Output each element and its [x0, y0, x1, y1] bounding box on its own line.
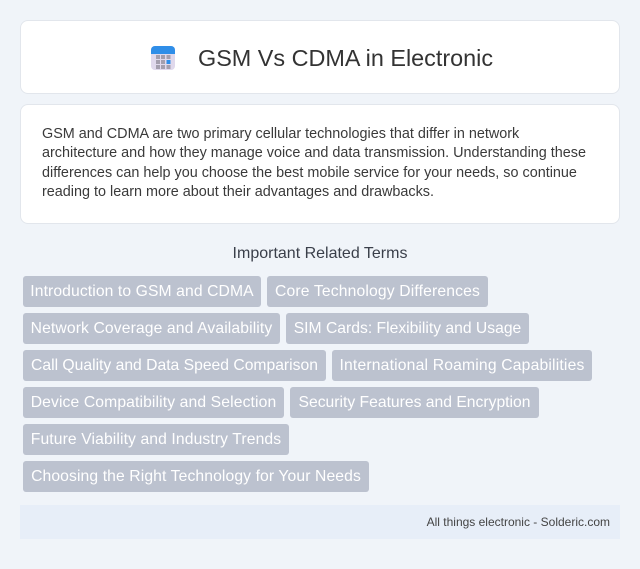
related term tags: Device Compatibility and Selection [31, 394, 276, 411]
related term tags: Security Features and Encryption [299, 394, 530, 411]
title: GSM Vs CDMA in Electronic [198, 45, 493, 71]
related term tags: Core Technology Differences [275, 283, 480, 300]
icon: calendar keypad [151, 46, 175, 70]
intro panel [20, 104, 620, 224]
section heading: Important Related Terms [233, 245, 407, 262]
footer bar [20, 505, 620, 539]
header panel [20, 20, 620, 94]
intro text: architecture and how they manage voice and data transmission. Understanding these [42, 145, 586, 161]
intro text: reading to learn more about their advantages and drawbacks. [42, 184, 434, 200]
related term tags: International Roaming Capabilities [339, 357, 585, 374]
related term tags: Call Quality and Data Speed Comparison [31, 357, 318, 374]
related term tags [23, 276, 592, 492]
related term tags: Network Coverage and Availability [31, 320, 272, 337]
related term tags: SIM Cards: Flexibility and Usage [294, 320, 521, 337]
related term tags: Choosing the Right Technology for Your Needs [31, 468, 361, 485]
intro text: GSM and CDMA are two primary cellular technologies that differ in network [42, 126, 519, 142]
related term tags: Introduction to GSM and CDMA [30, 283, 254, 300]
related term tags: Future Viability and Industry Trends [31, 431, 281, 448]
intro text: differences can help you choose the best mobile service for your needs, so continue [42, 165, 577, 181]
footer text: All things electronic - Solderic.com [427, 515, 610, 529]
intro text [42, 126, 586, 200]
